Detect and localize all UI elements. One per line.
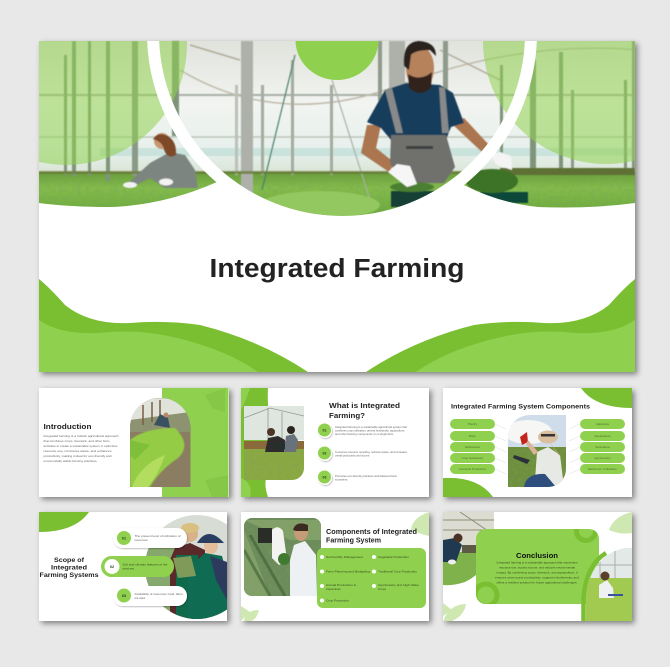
right pills: Sericulture (595, 445, 610, 449)
body text: resource use, minimizes waste, and enhances (44, 449, 112, 453)
heading: Conclusion (516, 551, 558, 560)
white ring (147, 41, 537, 216)
numbered item 03: 03 (323, 476, 326, 480)
left pills: Horticulture (465, 445, 480, 449)
photo: greenhouse with two farmers (39, 41, 640, 219)
body: resource use, boosts income, and reduces environmental (499, 566, 575, 570)
body text: activities to create a sustainable system. It optimizes (44, 444, 118, 448)
photo: woman with flowers (504, 415, 566, 487)
left pills: Livestock Production (459, 467, 487, 471)
heading (329, 401, 400, 420)
figure: woman farmer (123, 133, 198, 188)
green list panel: Traditional Crop Production (378, 570, 417, 574)
photo: scientists among plants (244, 518, 321, 596)
numbered item 01 (318, 424, 407, 438)
green list panel: Soil Fertility Management (326, 555, 363, 559)
heading: Farming System (326, 538, 381, 544)
photo: lettuce arch (130, 398, 191, 487)
pill 03: Availability of resources: land, labor, (134, 592, 184, 596)
numbered item 01: 01 (323, 428, 326, 432)
right pills: Mushroom Cultivation (588, 467, 617, 471)
arc ring (584, 553, 606, 621)
green list panel: Farm Planning and Budgeting (326, 570, 370, 574)
numbered item 01: combines crop cultivation, animal husbandry, aquaculture, (335, 428, 405, 432)
pill 03: 03 (122, 594, 126, 598)
right pills: Aquaculture (594, 434, 611, 438)
photo: two women in greenhouse (244, 406, 304, 480)
left pills: Dairy (469, 434, 476, 438)
body: impact. By combining crops, livestock, and aquaculture, it (496, 570, 578, 574)
green list panel: Crop Protection (326, 598, 349, 602)
left pills (450, 419, 495, 474)
green list panel: Aquaculture (326, 587, 341, 591)
pill 01: resources. (134, 538, 149, 542)
heading (326, 529, 417, 544)
green corner (39, 512, 89, 532)
pill 01: The present level of utilization of (134, 534, 181, 538)
numbered item 02: It ensures resource recycling, reduces waste, and increases (335, 450, 407, 454)
green list panel: Vegetable Production (378, 555, 409, 559)
main title: Integrated Farming (210, 255, 464, 283)
pill 03: and capital. (134, 596, 146, 600)
panel: Conclusion slide (443, 512, 632, 621)
body text: Integrated farming is a holistic agricultural approach (44, 434, 119, 438)
heading: Integrated (51, 564, 87, 572)
green panel (476, 529, 599, 604)
left pills: Crop Husbandry (462, 456, 484, 460)
pill 01 (113, 528, 187, 548)
numbered item 02: 02 (323, 452, 326, 456)
numbered item 02 (318, 446, 407, 461)
photo: worker right (585, 548, 632, 621)
body: Integrated farming is a sustainable approach that maximizes (496, 560, 578, 564)
numbered item 03 (318, 470, 397, 485)
pill 02: selected areas. (122, 566, 135, 570)
green left shapes (241, 388, 270, 497)
left pills: Poultry (468, 422, 478, 426)
heading (40, 557, 99, 579)
body (495, 560, 579, 584)
heading: Farming? (329, 411, 366, 420)
body text: that combines crops, livestock, and other farm (44, 439, 110, 443)
numbered item 01: and other farming components on a single farm. (335, 432, 394, 436)
panel: title slide (38, 40, 642, 378)
panel: Components slide (241, 512, 429, 621)
figure: man farmer (361, 41, 528, 207)
green list panel: Animal Production & (326, 583, 356, 587)
body text: economically stable farming practices. (44, 459, 98, 463)
pill 02: Soil and climatic features of the (122, 562, 168, 566)
heading: Introduction (44, 422, 92, 431)
green side block (162, 388, 228, 497)
heading: Farming Systems (40, 572, 99, 579)
heading: What is Integrated (329, 401, 400, 410)
panel: System Components slide (443, 388, 632, 497)
photo: two farmers with tablet (145, 512, 227, 621)
waves: bottom dark green (39, 279, 635, 372)
numbered item 03: Promotes eco-friendly practices and balanced farm (335, 474, 397, 478)
panel: Introduction slide (39, 388, 229, 497)
green list panel: Crops (378, 587, 386, 591)
panel: Scope slide (39, 512, 227, 621)
body: offers a resilient solution for future agricultural challenges. (496, 580, 578, 584)
right pills: Agroforestry (594, 456, 611, 460)
waves: bottom light green (39, 320, 635, 372)
heading: Scope of (54, 557, 85, 564)
green list panel: Agroforestry and High-Value (378, 583, 419, 587)
body: ensures year-round productivity, supports biodiversity, and (495, 576, 579, 580)
body text: productivity, making it ideal for eco-friendly and (44, 454, 112, 458)
pill 01: 01 (122, 536, 126, 540)
numbered item 03: ecosystems. (335, 478, 348, 482)
pill 02 (101, 556, 174, 577)
green list panel (317, 548, 426, 608)
body text (44, 434, 119, 463)
leaves (443, 512, 632, 621)
right pills: Apiculture (596, 422, 610, 426)
numbered item 02: overall productivity and income. (335, 454, 370, 458)
pill 03 (113, 586, 187, 606)
green corners (443, 388, 632, 497)
pill 02: 02 (110, 565, 114, 569)
numbered item 01: Integrated farming is a sustainable agricultural system that (335, 425, 407, 429)
connectors (495, 424, 580, 474)
leaves (241, 512, 429, 621)
heading: Integrated Farming System Components (451, 404, 590, 410)
overlay: translucent green circles (39, 41, 635, 216)
green top ellipse (296, 41, 378, 80)
photo: worker left (443, 512, 494, 588)
heading: Components of Integrated (326, 529, 417, 536)
panel: What is Integrated Farming slide (241, 388, 429, 497)
right pills (580, 419, 625, 474)
